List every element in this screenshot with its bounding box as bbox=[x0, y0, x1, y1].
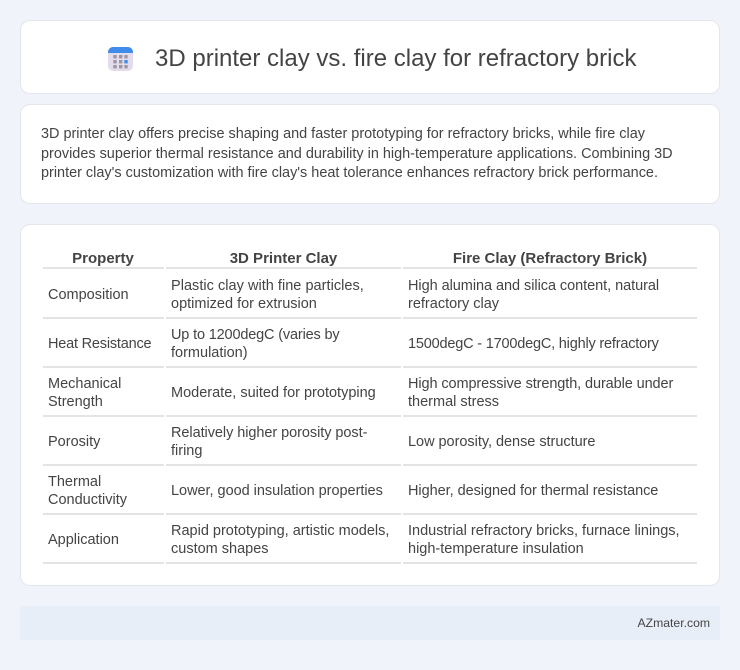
cell: Heat Resistance 3D printer clay: formulation) bbox=[171, 345, 248, 361]
cell: Heat Resistance 3D printer clay bbox=[171, 327, 340, 361]
panel: summary bbox=[20, 104, 720, 204]
summary text: 3D printer clay offers precise shaping and faster prototyping for refractory bricks, while fire clay bbox=[41, 126, 645, 142]
column header: Fire Clay: Fire Clay (Refractory Brick) bbox=[453, 250, 647, 267]
row: Thermal Conductivity: Conductivity bbox=[48, 492, 127, 508]
cell: Heat Resistance fire clay: 1500degC - 1700degC, highly refractory bbox=[408, 336, 659, 352]
cell: Thermal Conductivity fire clay: Higher, designed for thermal resistance bbox=[408, 483, 658, 499]
title: 3D printer clay vs. fire clay for refractory brick bbox=[155, 45, 636, 72]
cell: Application fire clay: Industrial refractory bricks, furnace linings, bbox=[408, 523, 680, 539]
cell: Application fire clay bbox=[408, 523, 680, 557]
panel: comparison table bbox=[20, 224, 720, 586]
cell: Application 3D printer clay: custom shapes bbox=[171, 541, 269, 557]
icon: calendar bbox=[108, 47, 133, 71]
column header: Property: Property bbox=[72, 250, 134, 267]
cell: Composition 3D printer clay: Plastic clay with fine particles, bbox=[171, 278, 364, 294]
row: Heat Resistance: Heat Resistance bbox=[48, 336, 151, 352]
row: Porosity: Porosity bbox=[48, 434, 100, 450]
cell: Application fire clay: high-temperature insulation bbox=[408, 541, 584, 557]
row: Mechanical Strength: Mechanical bbox=[48, 376, 121, 392]
row: Mechanical Strength: Strength bbox=[48, 394, 103, 410]
panel: title header bbox=[20, 20, 720, 94]
cell: Porosity fire clay: Low porosity, dense structure bbox=[408, 434, 595, 450]
cell: Mechanical Strength fire clay: High compressive strength, durable under bbox=[408, 376, 673, 392]
summary text: printer clay's customization with fire clay's heat tolerance enhances refractory brick performance. bbox=[41, 165, 658, 181]
cell: Mechanical Strength fire clay bbox=[408, 376, 674, 410]
row: Application: Application bbox=[48, 532, 119, 548]
row: Mechanical Strength bbox=[48, 376, 121, 410]
cell: Composition 3D printer clay: optimized for extrusion bbox=[171, 296, 317, 312]
cell: Porosity 3D printer clay: firing bbox=[171, 443, 202, 459]
cell: Porosity 3D printer clay bbox=[171, 425, 367, 459]
row: Thermal Conductivity: Thermal bbox=[48, 474, 101, 490]
cell: Mechanical Strength fire clay: thermal stress bbox=[408, 394, 499, 410]
cell: Thermal Conductivity 3D printer clay: Lower, good insulation properties bbox=[171, 483, 383, 499]
row: Composition: Composition bbox=[48, 287, 129, 303]
footer credit: AZmater.com bbox=[638, 616, 710, 630]
summary text bbox=[41, 126, 673, 181]
cell: Application 3D printer clay bbox=[171, 523, 389, 557]
row: Thermal Conductivity bbox=[48, 474, 127, 508]
column header: 3D Printer Clay: 3D Printer Clay bbox=[230, 250, 337, 267]
summary text: provides superior thermal resistance and durability in high-temperature applications. Combining 3D bbox=[41, 146, 673, 162]
cell: Composition 3D printer clay bbox=[171, 278, 364, 312]
cell: Composition fire clay: refractory clay bbox=[408, 296, 499, 312]
cell: Mechanical Strength 3D printer clay: Moderate, suited for prototyping bbox=[171, 385, 376, 401]
cell: Application 3D printer clay: Rapid prototyping, artistic models, bbox=[171, 523, 389, 539]
cell: Porosity 3D printer clay: Relatively higher porosity post- bbox=[171, 425, 367, 441]
cell: Composition fire clay: High alumina and silica content, natural bbox=[408, 278, 659, 294]
cell: Heat Resistance 3D printer clay: Up to 1200degC (varies by bbox=[171, 327, 340, 343]
cell: Composition fire clay bbox=[408, 278, 659, 312]
footer bar bbox=[20, 606, 720, 640]
